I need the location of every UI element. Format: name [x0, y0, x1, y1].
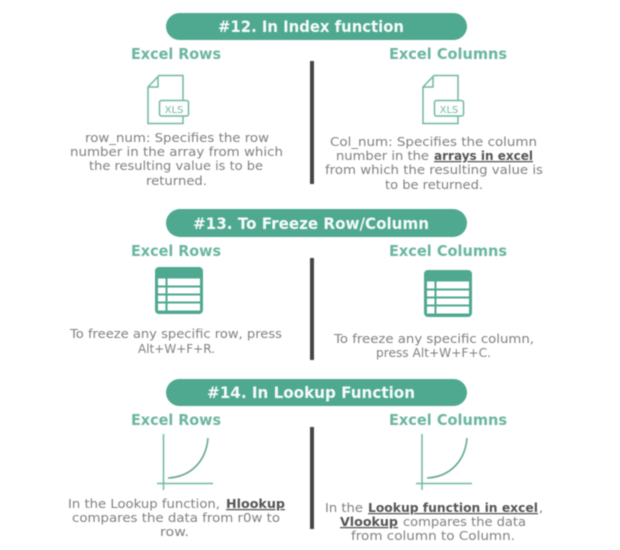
heading: excel columns: Excel Columns	[389, 242, 507, 260]
section 13: to freeze row/column	[69, 209, 534, 360]
heading: excel columns: Excel Columns	[389, 45, 507, 63]
title pill 12	[166, 13, 467, 40]
title pill 13	[166, 209, 467, 237]
text: rows description 14: compares the data from r0w to	[72, 510, 280, 525]
text: columns description 12: arrays in excel	[434, 148, 533, 163]
text: columns description 14	[325, 500, 543, 543]
divider 14	[310, 427, 314, 529]
section 12: in index function	[70, 13, 543, 192]
text: columns description 13: press Alt+W+F+C.	[376, 345, 491, 360]
text: columns description 13	[333, 331, 534, 360]
text: columns description 12	[325, 134, 543, 192]
text: columns description 12: Col_num: Specifies the column	[330, 134, 537, 149]
title pill 12: #12. In Index function	[218, 17, 404, 36]
text: rows description 13: Alt+W+F+R.	[138, 341, 215, 356]
text: rows description 12: returned.	[146, 173, 207, 188]
text: rows description 12: row_num: Specifies the row	[85, 130, 269, 145]
icon: xls file right	[423, 76, 464, 124]
icon: curve chart left	[157, 434, 213, 490]
heading: excel rows: Excel Rows	[131, 411, 221, 429]
text: columns description 14: ,	[539, 500, 543, 515]
text: rows description 14: In the Lookup function,	[68, 496, 220, 511]
divider 12	[310, 61, 314, 184]
text: columns description 12: from which the resulting value is	[325, 162, 543, 177]
text: rows description 13: To freeze any specific row, press	[69, 326, 282, 341]
text: rows description 14: row.	[160, 524, 189, 539]
title pill 13: #13. To Freeze Row/Column	[193, 214, 429, 233]
title pill 14	[166, 379, 467, 406]
text: columns description 12: number in the	[336, 148, 429, 163]
text: columns description 14: compares the data	[403, 514, 526, 529]
icon: curve chart right	[416, 434, 472, 490]
divider 13	[310, 258, 314, 360]
text: rows description 13	[69, 326, 282, 356]
heading: excel rows: Excel Rows	[131, 45, 221, 63]
text: rows description 12: number in the array from which	[70, 144, 283, 159]
heading: excel columns: Excel Columns	[389, 411, 507, 429]
icon: xls file left: XLS	[165, 105, 183, 116]
text: rows description 14	[68, 496, 285, 539]
heading: excel rows: Excel Rows	[131, 242, 221, 260]
text: columns description 14: Lookup function in excel	[368, 500, 538, 515]
text: columns description 12: to be returned.	[385, 177, 483, 192]
icon: xls file left	[148, 76, 188, 124]
text: rows description 14: Hlookup	[226, 496, 285, 511]
section 14: in lookup function	[68, 379, 543, 543]
text: columns description 14: from column to Column.	[351, 528, 515, 543]
icon: table left	[155, 267, 203, 314]
text: columns description 14: Vlookup	[340, 514, 398, 529]
icon: xls file right: XLS	[440, 105, 458, 116]
text: rows description 12: the resulting value is to be	[89, 158, 263, 173]
title pill 14: #14. In Lookup Function	[207, 383, 415, 402]
text: columns description 13: To freeze any specific column,	[333, 331, 534, 346]
icon: table right	[424, 270, 472, 317]
text: rows description 12	[70, 130, 283, 188]
text: columns description 14: In the	[325, 500, 363, 515]
